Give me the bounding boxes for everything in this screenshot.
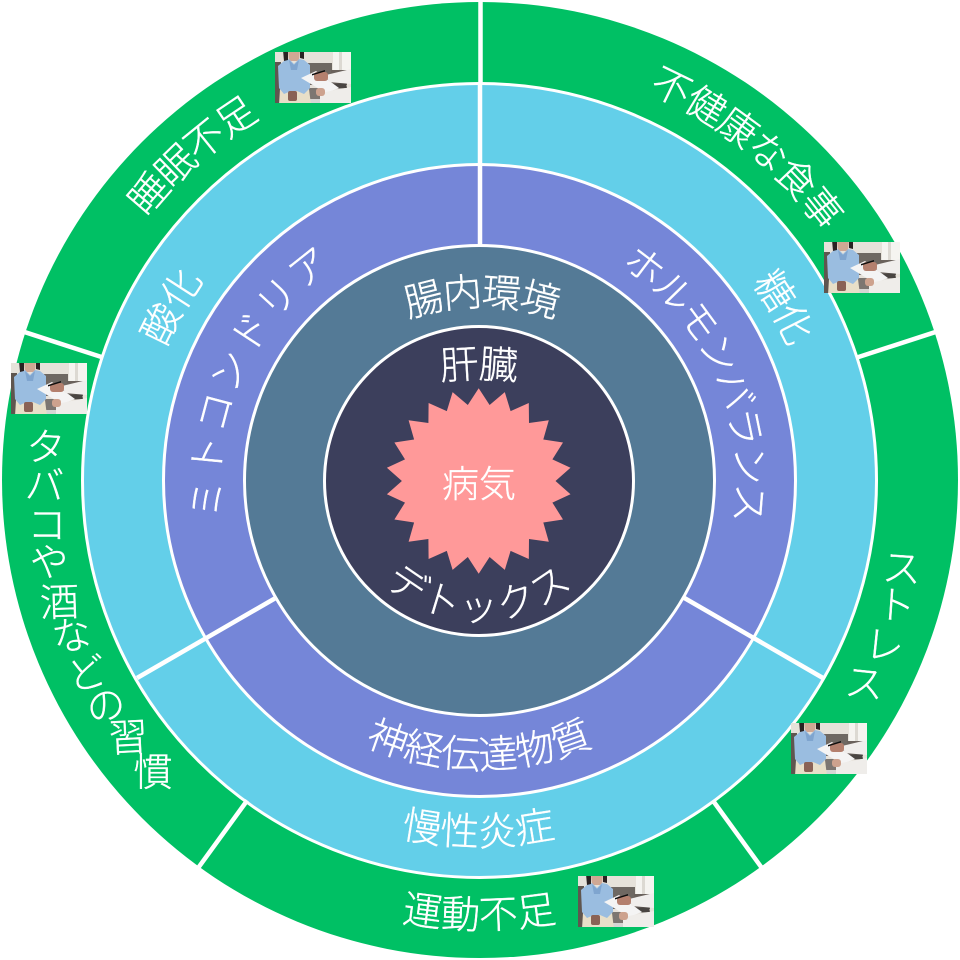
label: stress: ス xyxy=(843,661,886,708)
ring: purple function ring xyxy=(164,164,796,796)
starburst: disease xyxy=(387,388,570,574)
ring: teal gut ring xyxy=(244,246,714,716)
label: tobacco and alcohol habits: タ xyxy=(25,426,66,471)
label: oxidation: 酸化 xyxy=(138,270,203,346)
label: tobacco and alcohol habits: 習 xyxy=(108,716,149,761)
photo: consultation, sleep segment xyxy=(273,50,353,105)
ring: cyan metabolic ring xyxy=(82,84,876,878)
label: tobacco and alcohol habits: 酒 xyxy=(39,581,80,626)
label: stress: ス xyxy=(881,547,923,592)
label: tobacco and alcohol habits: の xyxy=(82,681,130,732)
label: chronic inflammation: 慢性炎症 xyxy=(404,806,555,849)
photo: consultation, diet segment xyxy=(822,240,902,295)
photo: consultation, exercise segment xyxy=(576,874,656,929)
label: tobacco and alcohol habits: コ xyxy=(27,505,67,548)
label: stress xyxy=(843,547,923,708)
label: glycation: 糖化 xyxy=(754,268,810,346)
ring: navy liver circle xyxy=(324,326,634,636)
label: lack of sleep: 睡眠不足 xyxy=(126,95,260,216)
label: tobacco and alcohol habits: や xyxy=(29,541,70,586)
label: disease: 病気 xyxy=(442,464,516,505)
label: tobacco and alcohol habits xyxy=(24,426,173,795)
label: stress: レ xyxy=(863,623,906,670)
photo: consultation, stress segment xyxy=(789,721,869,776)
label: neurotransmitters: 神経伝達物質 xyxy=(368,716,593,772)
label: tobacco and alcohol habits: バ xyxy=(24,464,65,509)
label: lack of exercise: 運動不足 xyxy=(402,891,556,932)
label: gut environment: 腸内環境 xyxy=(404,274,560,320)
label: stress: ト xyxy=(875,584,917,629)
label: liver: 肝臓 xyxy=(442,346,517,383)
label: unhealthy diet: 不健康な食事 xyxy=(654,65,845,227)
label: tobacco and alcohol habits: ど xyxy=(63,649,111,700)
label: hormone balance: ホルモンバランス xyxy=(626,248,764,518)
photo: consultation, tobacco segment xyxy=(9,361,89,416)
label: tobacco and alcohol habits: 慣 xyxy=(133,752,173,795)
label: detox: デトックス xyxy=(390,566,570,624)
label: mitochondria: ミトコンドリア xyxy=(191,247,314,512)
label: tobacco and alcohol habits: な xyxy=(49,612,95,661)
